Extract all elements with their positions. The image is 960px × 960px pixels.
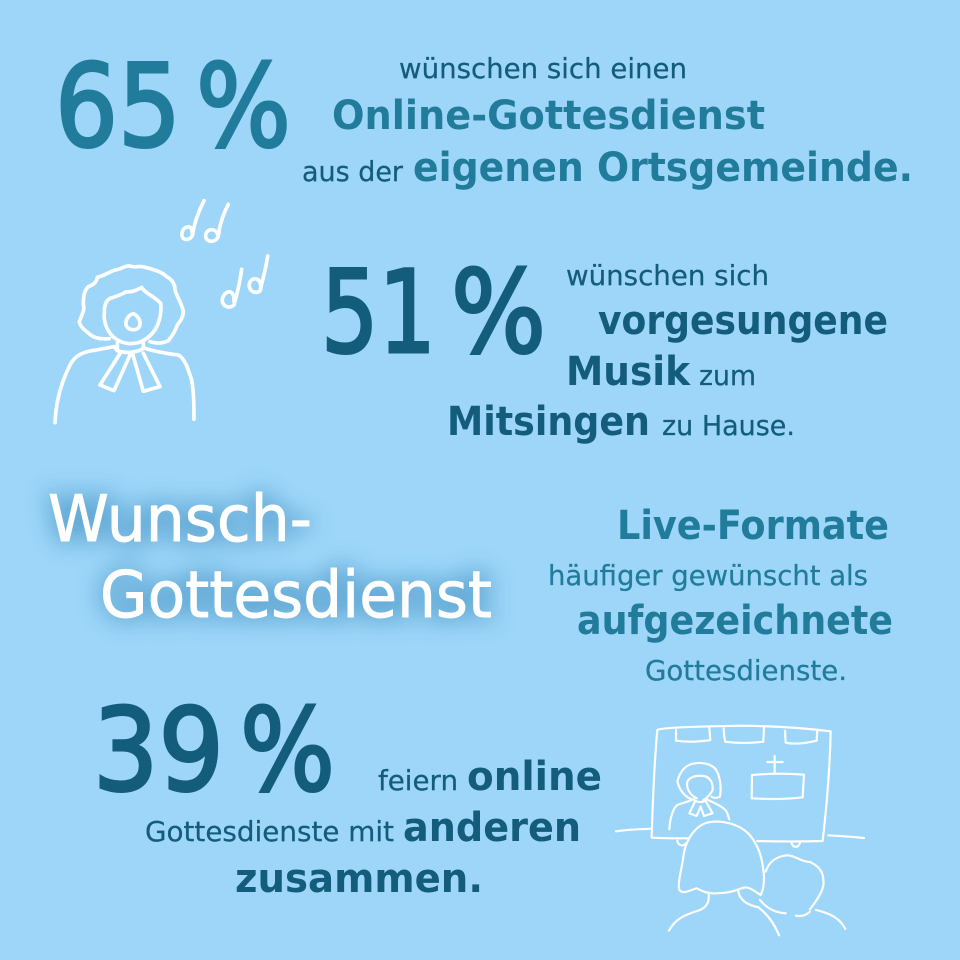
text: aufgezeichnete: aufgezeichnete <box>577 598 893 644</box>
title: Wunsch-Gottesdienst: Wunsch- <box>48 483 312 557</box>
icon: singing pastor with notes <box>55 201 268 423</box>
text: aus der: aus der <box>302 155 403 188</box>
icon: screen <box>652 726 831 841</box>
number: 65% <box>55 40 291 173</box>
icon: open mouth <box>126 314 140 330</box>
icon: table line <box>616 829 864 838</box>
text: zum: zum <box>699 359 756 392</box>
text: online: online <box>467 754 602 800</box>
number: 51%: % <box>451 246 546 379</box>
text: vorgesungene: vorgesungene <box>598 298 888 344</box>
icon: two viewers watching a screen <box>616 726 864 935</box>
text: häufiger gewünscht als: häufiger gewünscht als <box>548 559 868 592</box>
number: 39%: 39 <box>93 684 224 817</box>
icon: collar and shoulders <box>55 347 194 423</box>
text: Mitsingen: Mitsingen <box>447 399 650 445</box>
number: 51% <box>321 246 546 379</box>
text: zusammen.: zusammen. <box>235 856 483 902</box>
title: Wunsch-Gottesdienst: Wunsch- <box>48 483 312 557</box>
title: Wunsch-Gottesdienst: Gottesdienst <box>100 559 492 633</box>
stat block: 51% sung music <box>321 246 888 445</box>
number: 65%: % <box>196 40 291 173</box>
text: Gottesdienste.: Gottesdienste. <box>645 654 847 687</box>
title: Wunsch-Gottesdienst <box>48 483 492 633</box>
number: 65%: 65 <box>55 40 181 173</box>
text: Gottesdienste mit: Gottesdienste mit <box>145 815 394 848</box>
icon: preaching bands <box>100 353 130 391</box>
icon: music notes <box>182 201 268 307</box>
text: Musik: Musik <box>566 349 691 395</box>
text: anderen: anderen <box>403 805 581 851</box>
icon: altar with cross <box>752 774 804 799</box>
icon: screen feet <box>677 841 800 847</box>
icon: front viewer <box>679 822 764 895</box>
text: zu Hause.: zu Hause. <box>662 409 795 442</box>
stat block: 39% celebrate together <box>93 684 602 902</box>
number: 51%: 51 <box>321 246 436 379</box>
title: Wunsch-Gottesdienst: Gottesdienst <box>100 559 492 633</box>
icon: face <box>104 287 161 344</box>
text: wünschen sich: wünschen sich <box>566 259 769 292</box>
text: Online-Gottesdienst: Online-Gottesdienst <box>332 93 765 139</box>
icon: rear viewer <box>766 855 824 909</box>
icon: screen tabs <box>676 727 817 744</box>
number: 39% <box>93 684 335 817</box>
text: feiern: feiern <box>378 764 458 797</box>
stat block: live formats <box>548 503 893 687</box>
icon: hair <box>79 266 183 343</box>
stat block: 65% online service from own congregation <box>55 40 913 191</box>
text: Live-Formate: Live-Formate <box>617 503 889 549</box>
text: eigenen Ortsgemeinde.: eigenen Ortsgemeinde. <box>413 145 913 191</box>
icon: pastor on screen <box>677 763 721 799</box>
number: 39%: % <box>240 684 335 817</box>
text: wünschen sich einen: wünschen sich einen <box>399 52 687 85</box>
